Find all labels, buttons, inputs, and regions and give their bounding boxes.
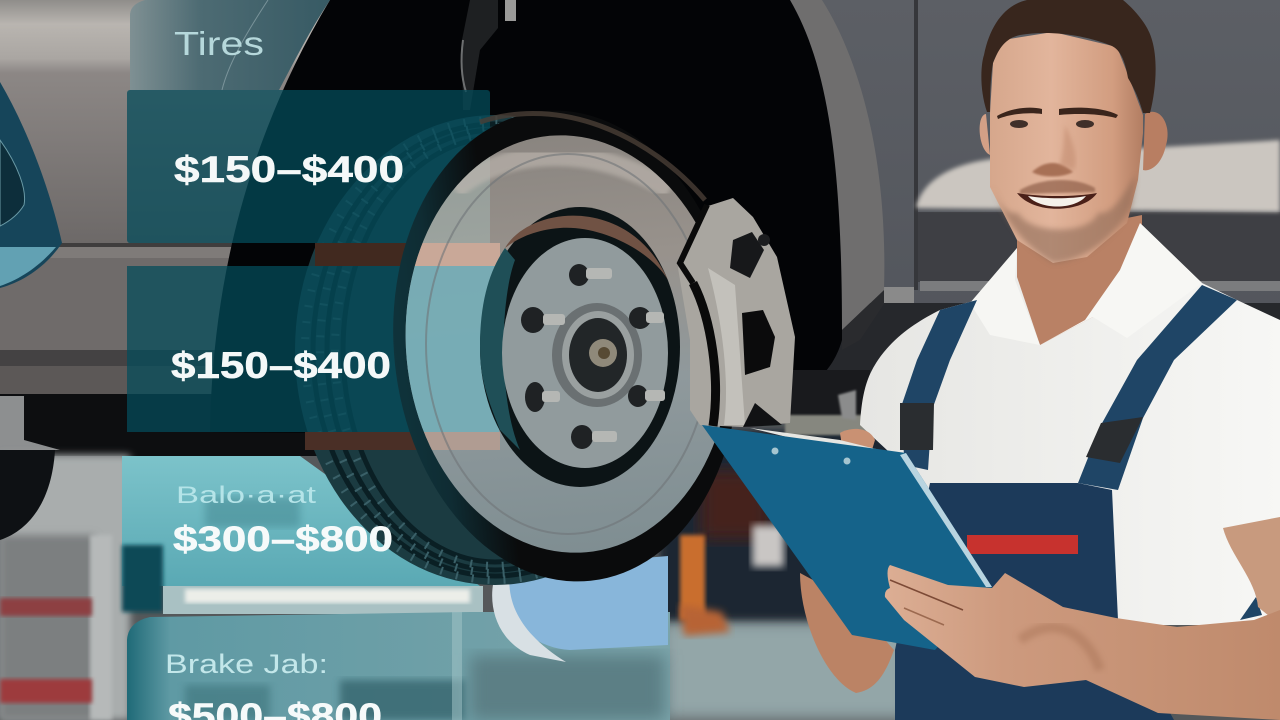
price: first tires range: $150–$400 xyxy=(174,149,404,190)
car body upper right xyxy=(820,0,1280,420)
label: brake job: Brake Jab: xyxy=(165,649,328,679)
hand behind clipboard top xyxy=(840,429,875,450)
car left fender shape xyxy=(0,82,62,288)
panel: second price xyxy=(127,266,499,432)
straps xyxy=(900,300,977,470)
tire xyxy=(295,115,695,585)
red pocket stripe xyxy=(967,535,1078,554)
mechanic xyxy=(800,0,1280,720)
upper lip shade xyxy=(1020,180,1095,194)
left arm xyxy=(800,573,894,693)
clipboard xyxy=(702,425,992,650)
stubble xyxy=(993,175,1136,263)
collar right xyxy=(1040,223,1202,345)
hand and forearm holding clipboard xyxy=(885,565,1280,720)
brake caliper xyxy=(678,198,795,427)
brake rotor xyxy=(393,111,732,582)
price: third range: $300–$800 xyxy=(173,520,393,559)
smile xyxy=(1017,193,1097,209)
label: garbled third heading: Balo·a·at xyxy=(176,482,316,509)
panel: third price background xyxy=(122,456,483,614)
tinted panel stripes over rotor xyxy=(422,156,490,243)
price: second range: $150–$400 xyxy=(171,345,391,386)
overalls bib xyxy=(895,483,1174,720)
panel: tires price xyxy=(127,90,490,243)
brows and eyes xyxy=(997,108,1118,119)
panel: tires label background xyxy=(130,0,330,90)
upper arm right xyxy=(1223,517,1280,625)
lug nuts xyxy=(521,264,665,449)
blue jack base xyxy=(500,556,668,650)
collar left xyxy=(970,248,1040,345)
wheel arch xyxy=(210,0,884,435)
face xyxy=(990,32,1143,263)
panel: brake job background xyxy=(127,556,670,720)
shirt torso xyxy=(860,223,1280,625)
buckles xyxy=(900,403,934,450)
neck xyxy=(1017,215,1142,345)
label: tires heading: Tires xyxy=(174,25,264,62)
reddish band through tire xyxy=(315,243,430,266)
garage floor and orange stand xyxy=(660,620,910,720)
hair xyxy=(981,0,1156,113)
ears xyxy=(980,114,990,155)
nose shadow xyxy=(1032,163,1073,176)
